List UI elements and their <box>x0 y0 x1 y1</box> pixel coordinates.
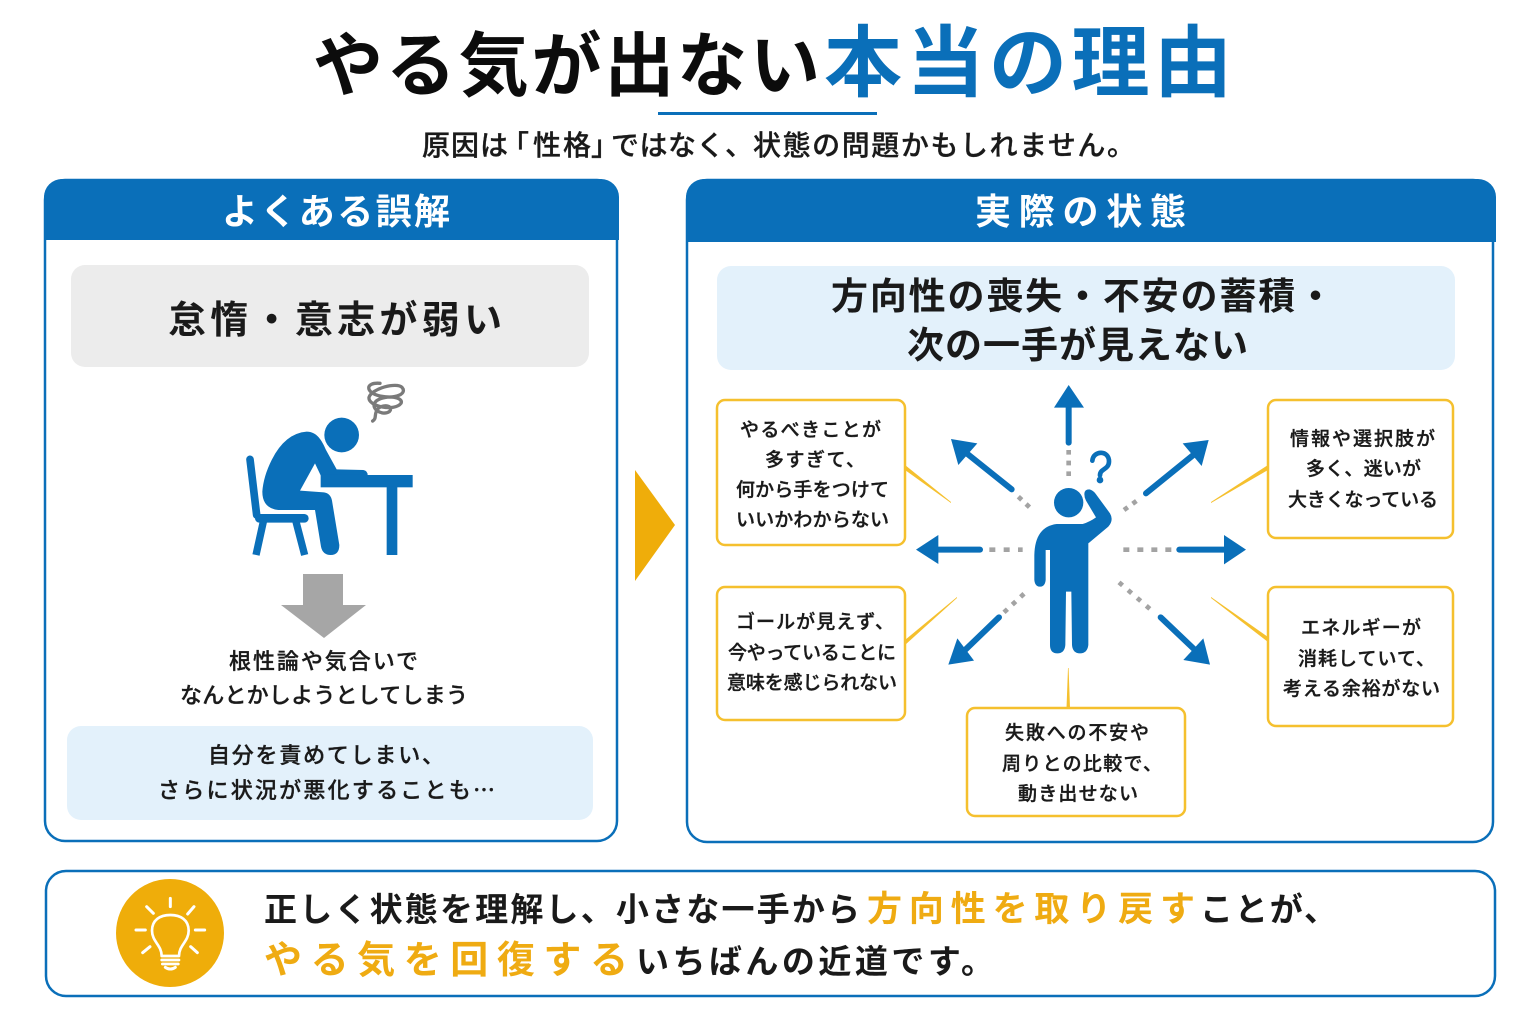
subtitle: 原因は <box>422 130 508 161</box>
conclusion text: ことが、 <box>1200 891 1337 928</box>
box: too many tasks <box>717 400 905 545</box>
box: too many tasks: 多すぎて、 <box>765 449 865 471</box>
panel: conclusion <box>46 871 1495 996</box>
text: relying on willpower: 根性論や気合いで <box>229 649 418 674</box>
arrow: chevron to actual state <box>635 470 675 581</box>
conclusion text: 方向性を取り戻す <box>867 890 1195 929</box>
box: too much information: 情報や選択肢が <box>1290 428 1435 450</box>
title <box>313 19 1232 107</box>
figure: confused person with arrows <box>916 385 1246 665</box>
subtitle: 」 <box>591 130 619 161</box>
panel: common misconception <box>44 179 619 841</box>
question mark <box>1092 453 1109 483</box>
text: relying on willpower <box>180 649 468 708</box>
box: goal not visible: 今やっていることに <box>728 642 896 664</box>
box: fear of failure: 失敗への不安や <box>1005 722 1149 744</box>
box: low energy: エネルギーが <box>1301 617 1421 639</box>
box: goal not visible <box>717 587 905 720</box>
subtitle: ではなく、 <box>611 130 753 161</box>
box: low energy: 消耗していて、 <box>1298 648 1435 670</box>
panel: actual state <box>686 179 1496 842</box>
panel header: misconception <box>44 179 619 240</box>
callout: worsening: さらに状況が悪化することも… <box>158 773 495 805</box>
subtitle <box>422 130 1135 161</box>
label: loss of direction: 次の一手が見えない <box>907 325 1248 366</box>
callout: worsening: 自分を責めてしまい、 <box>208 743 444 768</box>
box: too much information: 多く、迷いが <box>1306 458 1421 480</box>
callout: worsening <box>67 726 593 820</box>
conclusion text: いちばんの近道です。 <box>636 943 994 980</box>
title: やる気が出ない <box>313 27 820 105</box>
box: low energy <box>1268 587 1453 726</box>
box: too many tasks: やるべきことが <box>740 419 881 441</box>
dashed guides <box>989 450 1172 613</box>
box: too many tasks: いいかわからない <box>736 509 889 531</box>
box: goal not visible: 意味を感じられない <box>727 672 897 694</box>
subtitle: 性格 <box>533 130 591 161</box>
box: fear of failure: 動き出せない <box>1018 783 1138 805</box>
box: fear of failure: 周りとの比較で、 <box>1002 753 1162 775</box>
box: low energy: 考える余裕がない <box>1283 678 1440 700</box>
subtitle: 状態の問題かもしれません。 <box>753 130 1135 161</box>
title underline <box>658 112 877 115</box>
box: too much information: 大きくなっている <box>1288 489 1438 511</box>
text: relying on willpower: なんとかしようとしてしまう <box>180 683 468 708</box>
label: loss of direction <box>717 266 1455 370</box>
connectors to boxes <box>905 465 1268 708</box>
panel header: actual state: 実際の状態 <box>975 191 1186 232</box>
arrow: down <box>281 574 366 638</box>
conclusion text: やる気を回復する <box>264 940 628 982</box>
title: 本当の理由 <box>824 19 1232 107</box>
label: loss of direction: 方向性の喪失・不安の蓄積・ <box>831 276 1334 317</box>
box: too much information <box>1268 400 1453 538</box>
icon: light bulb <box>116 879 224 987</box>
person <box>1034 488 1112 653</box>
panel header: actual state <box>686 179 1496 242</box>
conclusion text <box>264 890 1337 982</box>
box: fear of failure <box>967 708 1185 816</box>
box: too many tasks: 何から手をつけて <box>736 479 889 501</box>
label: laziness <box>71 265 589 367</box>
label: laziness: 怠惰・意志が弱い <box>168 300 502 342</box>
box: goal not visible: ゴールが見えず、 <box>736 610 894 633</box>
conclusion text: 正しく状態を理解し、小さな一手から <box>264 891 860 928</box>
arrows <box>916 385 1246 665</box>
icon: slumped person at desk <box>250 383 413 555</box>
subtitle: 「 <box>501 130 529 161</box>
panel header: misconception: よくある誤解 <box>222 191 450 232</box>
